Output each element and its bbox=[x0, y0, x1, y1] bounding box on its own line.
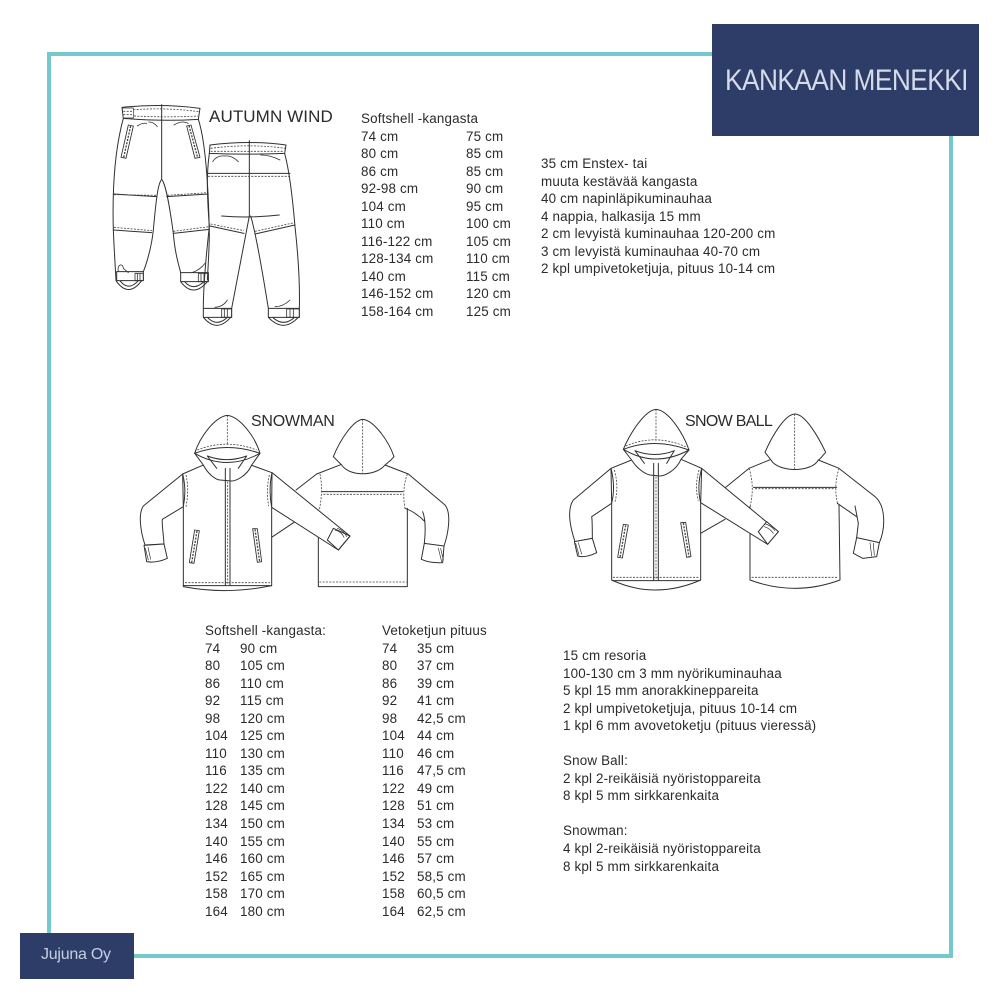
text: jacket fabric amounts: 90 cm 105 cm 110 cm 115 cm 120 cm 125 cm 130 cm 135 cm 140 cm 145 cm 150 cm 155 cm 160 cm 165 cm 170 cm 180 cm bbox=[240, 640, 285, 919]
text: Autumn Wind fabric amounts: 75 cm 85 cm 85 cm 90 cm 95 cm 100 cm 105 cm 110 cm 115 cm 120 cm 125 cm bbox=[466, 128, 511, 319]
footer text: Jujuna Oy bbox=[41, 946, 111, 963]
heading: Autumn Wind: AUTUMN WIND bbox=[209, 107, 333, 126]
title box bbox=[712, 24, 979, 136]
title text: KANKAAN MENEKKI bbox=[725, 64, 968, 97]
text: jacket softshell sizes: Softshell -kangasta: 74 80 86 92 98 104 110 116 122 128 134 140 146 152 158 164 bbox=[205, 623, 326, 919]
text: Autumn Wind softshell sizes: Softshell -kangasta 74 cm 80 cm 86 cm 92-98 cm 104 cm 110 cm 116-122 cm 128-134 cm 140 cm 146-152 cm 158-164 cm bbox=[361, 111, 478, 319]
text: Autumn Wind materials: 35 cm Enstex- tai muuta kestävää kangasta 40 cm napinläpikuminauhaa 4 nappia, halkasija 15 mm 2 cm levyistä kuminauhaa 120-200 cm 3 cm levyistä kuminauhaa 40-70 cm 2 kpl umpivetoketjuja, pituus 10-14 cm bbox=[541, 156, 775, 276]
pants front view bbox=[113, 105, 209, 290]
heading: Snow Ball: SNOW BALL bbox=[685, 413, 772, 430]
Snowman jacket front view bbox=[140, 415, 350, 591]
text: zipper lengths: 35 cm 37 cm 39 cm 41 cm 42,5 cm 44 cm 46 cm 47,5 cm 49 cm 51 cm 53 cm 55 cm 57 cm 58,5 cm 60,5 cm 62,5 cm bbox=[417, 640, 466, 919]
text: zipper sizes: Vetoketjun pituus 74 80 86 92 98 104 110 116 122 128 134 140 146 152 158 164 bbox=[382, 623, 487, 919]
Snow Ball jacket front view bbox=[570, 409, 778, 590]
footer box bbox=[20, 933, 134, 979]
Snow Ball jacket back view bbox=[701, 414, 884, 588]
pants back view bbox=[203, 141, 299, 325]
Snowman jacket back view bbox=[272, 419, 449, 587]
heading: Snowman: SNOWMAN bbox=[251, 413, 335, 430]
text: jacket materials: 15 cm resoria 100-130 cm 3 mm nyörikuminauhaa 5 kpl 15 mm anorakkineppareita 2 kpl umpivetoketjuja, pituus 10-14 cm 1 kpl 6 mm avovetoketju (pituus vieressä) Snow Ball: 2 kpl 2-reikäisiä nyöristoppareita 8 kpl 5 mm sirkkarenkaita Snowman: 4 kpl 2-reikäisiä nyöristoppareita 8 kpl 5 mm sirkkarenkaita bbox=[563, 648, 816, 874]
